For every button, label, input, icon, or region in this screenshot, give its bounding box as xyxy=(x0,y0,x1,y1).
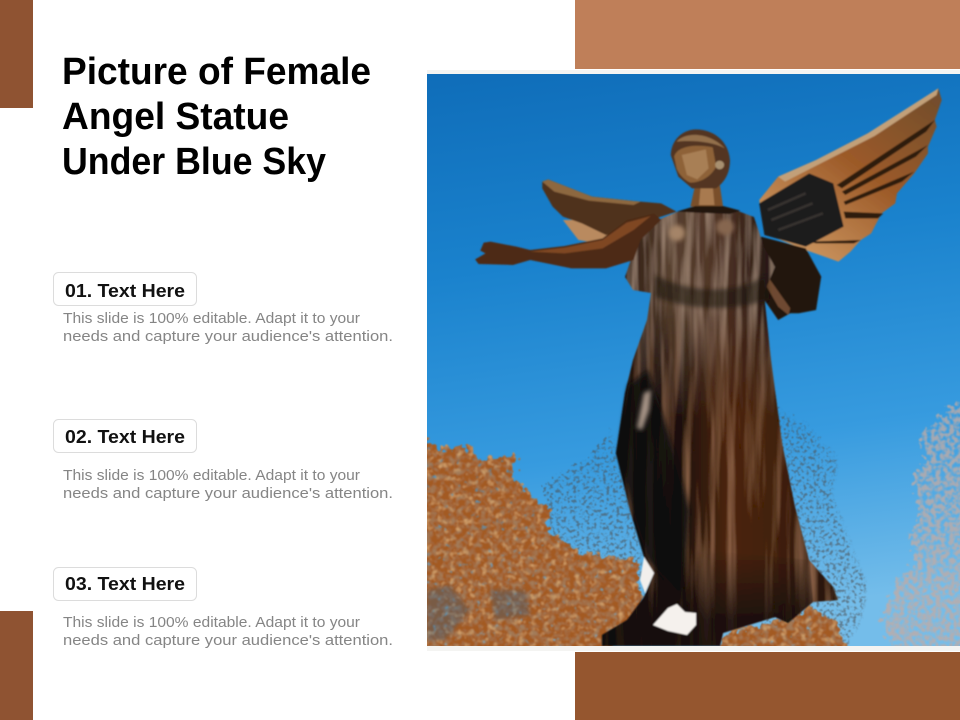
orange tree, left xyxy=(420,435,642,660)
decorative band: top right xyxy=(575,0,960,69)
description 03: needs and capture your audience's attention. xyxy=(63,633,393,649)
left shadow fold xyxy=(618,370,690,600)
photo border: bottom xyxy=(427,646,960,651)
photo border: top xyxy=(427,70,960,74)
description 02 xyxy=(63,468,393,502)
bare tree, left xyxy=(545,430,650,600)
right wing xyxy=(759,88,942,262)
description 02: needs and capture your audience's attention. xyxy=(63,486,393,502)
photo: angel statue under blue sky xyxy=(420,74,960,660)
item 03 xyxy=(54,568,393,649)
gap between feet xyxy=(653,604,696,635)
light patch on left fold xyxy=(637,390,651,430)
dress xyxy=(602,208,838,646)
dress base xyxy=(602,208,838,646)
dark gaps in orange tree xyxy=(427,585,530,640)
label box 02: 02. Text Here xyxy=(65,427,185,447)
decorative block: bottom left xyxy=(0,611,33,720)
trees xyxy=(427,400,960,646)
neck xyxy=(690,183,723,207)
feet shadow xyxy=(602,545,813,646)
dress lower dark tone xyxy=(602,302,838,646)
description 01: needs and capture your audience's attention. xyxy=(63,329,393,345)
bare tree behind statue, right xyxy=(760,410,870,646)
description 02: This slide is 100% editable. Adapt it to your xyxy=(63,468,360,484)
title: Picture of Female xyxy=(62,51,371,93)
head xyxy=(671,129,740,214)
description 03: This slide is 100% editable. Adapt it to your xyxy=(63,615,360,631)
dark wing base xyxy=(759,173,844,247)
title: Angel Statue xyxy=(62,96,289,138)
description 01: This slide is 100% editable. Adapt it to your xyxy=(63,311,360,327)
ear xyxy=(715,161,724,169)
label box 01 xyxy=(54,272,196,306)
description 03 xyxy=(63,615,393,649)
decorative block: top left xyxy=(0,0,33,108)
label box 02 xyxy=(54,420,196,452)
hair xyxy=(671,129,730,188)
gap behind foot xyxy=(640,557,654,593)
left wing xyxy=(542,179,677,243)
label box 01: 01. Text Here xyxy=(65,281,185,301)
sky xyxy=(427,74,960,646)
description 01 xyxy=(63,311,393,345)
chest highlights xyxy=(669,225,685,241)
decorative band: bottom right xyxy=(575,652,960,720)
title xyxy=(62,51,371,183)
title: Under Blue Sky xyxy=(62,141,326,183)
label box 03: 03. Text Here xyxy=(65,574,185,594)
item 02 xyxy=(54,420,393,502)
pale tree, right xyxy=(882,390,960,660)
hair highlights xyxy=(677,135,725,148)
statue xyxy=(475,88,942,646)
item 01 xyxy=(54,272,393,345)
arm xyxy=(475,213,661,268)
waist shadow xyxy=(655,275,768,308)
orange bush, lower right xyxy=(718,604,848,646)
collar xyxy=(677,206,740,214)
face xyxy=(674,146,716,183)
lower wing behind body xyxy=(761,237,821,320)
label box 03 xyxy=(54,568,196,600)
